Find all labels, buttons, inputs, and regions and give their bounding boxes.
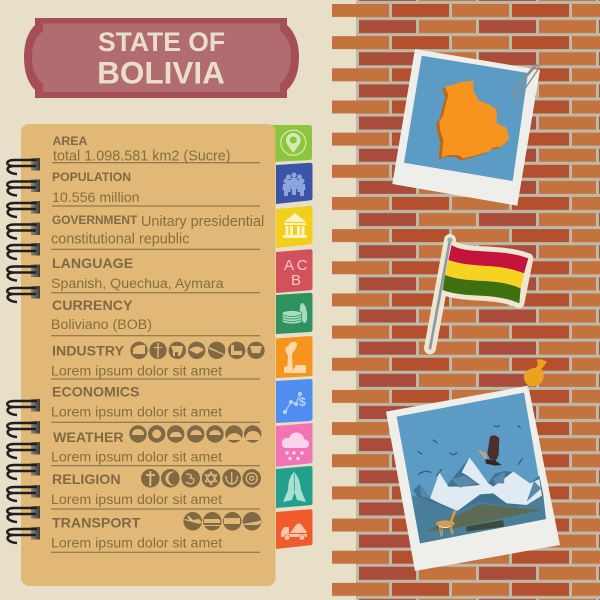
section: industry: Lorem ipsum dolor sit amet [51,363,222,379]
colored side tabs [270,125,312,549]
section: area: AREA [52,134,87,148]
section: currency: CURRENCY [52,298,133,314]
map shape [436,81,509,160]
icon: push pin [524,359,547,388]
section: area [52,134,231,164]
weather icons [129,425,261,443]
icon: paper clip [512,65,539,99]
section: population [52,170,140,206]
title text: BOLIVIA [97,54,225,90]
section: language [51,256,224,292]
icon: alphabet: A [284,257,294,274]
section: population: 10.556 million [52,190,140,206]
industry icons [130,342,265,359]
title banner [24,18,299,98]
icon: population [282,172,306,196]
section: government: GOVERNMENT [52,213,138,227]
polaroid: Andes landscape [386,359,560,571]
section: weather: WEATHER [53,430,124,446]
section: area: total 1.098.581 km2 (Sucre) [53,148,231,164]
title text: STATE OF [98,27,225,57]
section: transport: Lorem ipsum dolor sit amet [51,535,222,551]
section: industry [51,342,265,379]
section: language: Spanish, Quechua, Aymara [51,276,224,292]
notebook panel [21,124,276,586]
section: government: Unitary presidential [141,214,264,230]
icon: alphabet: B [291,272,301,289]
transport icons [183,512,261,531]
section: government: constitutional republic [51,232,189,248]
section: religion: Lorem ipsum dolor sit amet [51,492,222,508]
section: transport [51,512,261,551]
section: economics: Lorem ipsum dolor sit amet [51,405,222,421]
icon: economics chart [284,392,306,414]
icon: location pin [281,130,306,155]
icon: alphabet [284,257,308,289]
section: industry: INDUSTRY [52,344,125,360]
section: religion [51,469,261,508]
birds [417,425,523,476]
section: weather: Lorem ipsum dolor sit amet [51,450,222,466]
flag of Bolivia [430,237,528,348]
section: economics [51,385,222,421]
icon: factory [284,342,306,373]
section: weather [51,425,261,466]
section: economics: ECONOMICS [52,385,140,401]
section: currency [51,298,152,333]
section: population: POPULATION [52,170,131,184]
icon: coins [282,303,308,324]
icon: truck [281,523,307,540]
icon: alphabet: C [297,257,308,274]
icon: economics chart: $ [299,395,306,409]
section: government [51,213,264,248]
icon: praying hands [283,472,306,502]
divider lines [51,163,260,552]
icon: rain cloud [282,433,309,460]
section: religion: RELIGION [52,472,121,488]
mountains [412,458,546,543]
spiral binding [7,158,40,543]
section: currency: Boliviano (BOB) [51,317,152,333]
religion icons [141,469,261,488]
section: transport: TRANSPORT [52,515,141,531]
section: language: LANGUAGE [52,256,133,272]
brick wall [332,0,600,600]
title text [97,27,225,90]
guanaco [436,512,455,536]
eagle [478,435,502,466]
polaroid: map of Bolivia [392,49,540,206]
icon: government building [283,213,307,238]
